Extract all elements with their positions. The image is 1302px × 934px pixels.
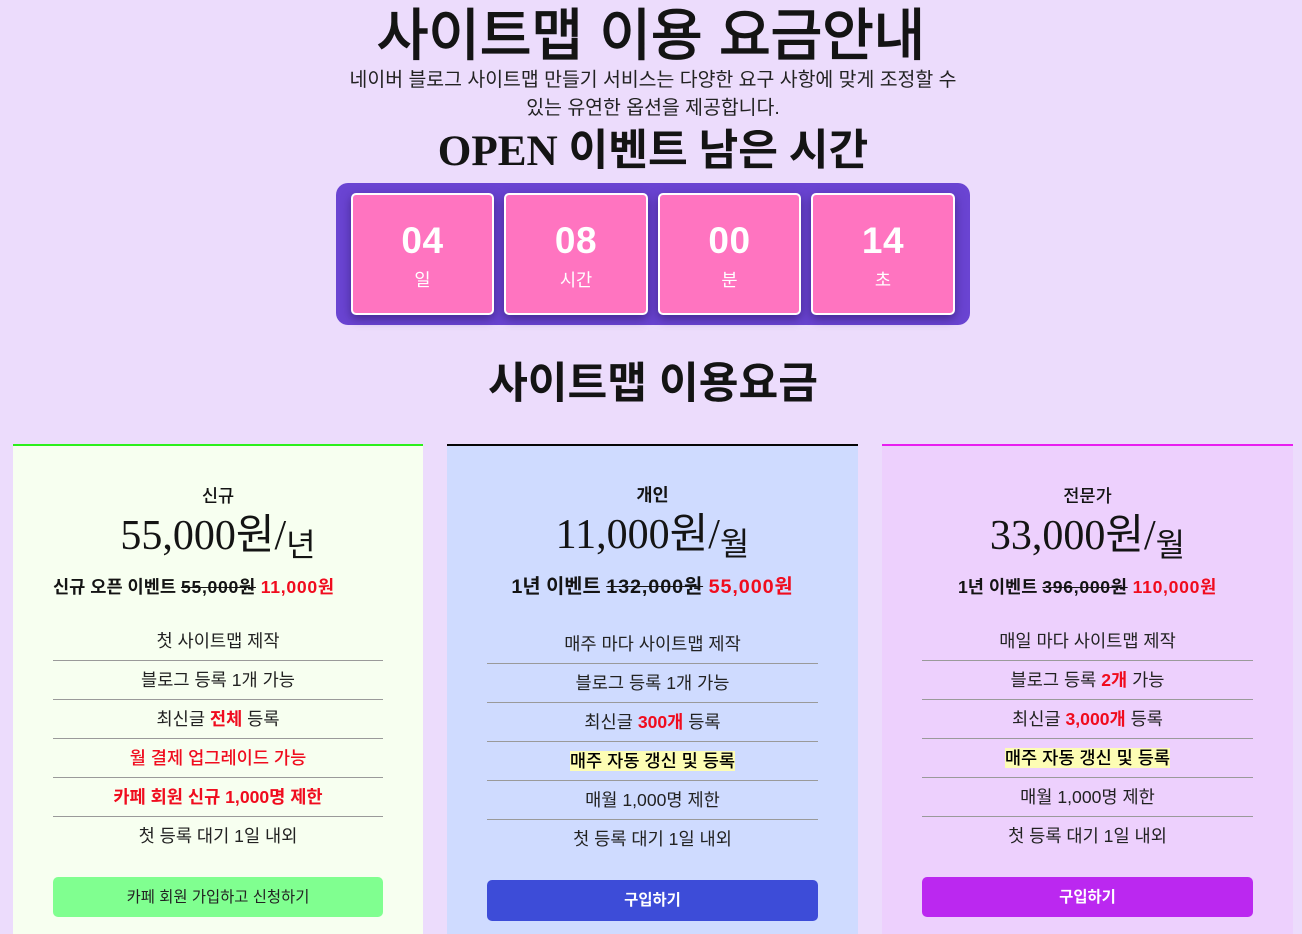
countdown: hours (504, 193, 648, 315)
countdown: days: 04 (401, 220, 444, 261)
feature list: 첫 등록 대기 1일 내외 (139, 826, 297, 846)
panel: new plan (13, 444, 423, 934)
price: 33,000원/월 (990, 513, 1185, 563)
event price: 신규 오픈 이벤트 55,000원 11,000원 (53, 577, 335, 597)
feature list: 최신글 300개 등록 (584, 712, 721, 732)
feature list: 매주 자동 갱신 및 등록 (570, 751, 735, 771)
feature list: 첫 등록 대기 1일 내외 (1008, 826, 1167, 846)
event price: 1년 이벤트 396,000원 110,000원 (958, 577, 1217, 597)
button: 구입하기 (624, 892, 681, 909)
countdown: seconds (811, 193, 955, 315)
countdown: minutes: 00 (708, 220, 751, 261)
price: 55,000원/년 (120, 513, 316, 563)
countdown: hours: 시간 (560, 270, 592, 290)
panel: expert plan (882, 444, 1293, 934)
feature list: 첫 사이트맵 제작 (156, 631, 280, 651)
countdown: days: 일 (414, 270, 431, 290)
event price: 1년 이벤트 132,000원 55,000원 (511, 576, 794, 598)
feature list: 매월 1,000명 제한 (585, 790, 720, 810)
countdown: seconds: 14 (862, 220, 904, 261)
feature list (487, 634, 818, 849)
feature list: 매월 1,000명 제한 (1020, 787, 1155, 807)
feature list: 매주 자동 갱신 및 등록 (1005, 748, 1170, 768)
button (487, 880, 818, 921)
plan name: 개인 (636, 485, 669, 505)
feature list: 최신글 3,000개 등록 (1012, 709, 1163, 729)
countdown: minutes (658, 193, 801, 315)
plan name: 전문가 (1063, 486, 1112, 506)
button (922, 877, 1253, 917)
feature list: 매주 마다 사이트맵 제작 (564, 634, 741, 654)
feature list: 월 결제 업그레이드 가능 (130, 748, 306, 768)
button: 카페 회원 가입하고 신청하기 (127, 889, 309, 906)
feature list (53, 631, 383, 846)
feature list: 블로그 등록 1개 가능 (141, 670, 295, 690)
feature list: 첫 등록 대기 1일 내외 (573, 829, 732, 849)
countdown: minutes: 분 (721, 270, 738, 290)
feature list: 블로그 등록 1개 가능 (576, 673, 729, 693)
countdown: days (351, 193, 494, 315)
countdown: seconds: 초 (875, 270, 891, 290)
title: 사이트맵 이용 요금안내 (377, 4, 925, 67)
feature list: 카페 회원 신규 1,000명 제한 (113, 787, 323, 807)
countdown panel (336, 183, 970, 325)
feature list: 블로그 등록 2개 가능 (1011, 670, 1164, 690)
panel: personal plan (447, 444, 858, 934)
countdown heading: OPEN 이벤트 남은 시간 (438, 128, 868, 175)
button (53, 877, 383, 917)
button: 구입하기 (1059, 889, 1116, 906)
pricing heading: 사이트맵 이용요금 (488, 360, 818, 408)
plan name: 신규 (202, 486, 234, 506)
intro text: 있는 유연한 옵션을 제공합니다. (526, 97, 780, 119)
countdown: hours: 08 (555, 220, 597, 261)
price: 11,000원/월 (556, 512, 749, 562)
feature list (922, 631, 1253, 846)
intro text: 네이버 블로그 사이트맵 만들기 서비스는 다양한 요구 사항에 맞게 조정할 수 (350, 69, 956, 91)
intro text (350, 69, 956, 119)
feature list: 매일 마다 사이트맵 제작 (999, 631, 1176, 651)
feature list: 최신글 전체 등록 (156, 709, 280, 729)
